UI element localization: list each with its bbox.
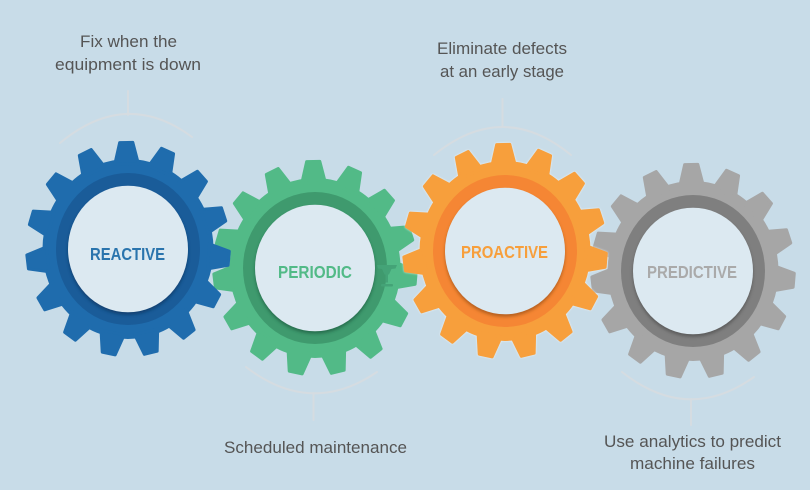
gear: periodic — [211, 160, 419, 377]
connector: periodic bracket — [246, 367, 377, 420]
caption: predictive — [604, 433, 781, 473]
icon: trophy on periodic gear — [377, 265, 397, 286]
connector: reactive bracket — [60, 91, 192, 143]
caption: predictive: machine failures — [630, 455, 755, 473]
label: reactive: REACTIVE — [90, 244, 165, 264]
caption: proactive: Eliminate defects — [437, 40, 567, 58]
caption: predictive: Use analytics to predict — [604, 433, 781, 451]
caption: reactive: equipment is down — [55, 56, 201, 74]
caption: proactive — [437, 40, 567, 81]
caption: reactive: Fix when the — [80, 33, 177, 51]
gear: reactive — [24, 141, 232, 358]
caption: proactive: at an early stage — [440, 63, 564, 81]
label: periodic: PERIODIC — [278, 262, 352, 282]
connector: predictive bracket — [622, 372, 754, 425]
gear: predictive — [589, 163, 797, 380]
caption: reactive — [55, 33, 201, 74]
caption: periodic: Scheduled maintenance — [224, 439, 407, 457]
label: proactive: PROACTIVE — [461, 242, 548, 262]
gear: proactive — [401, 143, 609, 360]
connector: proactive bracket — [434, 99, 571, 155]
label: predictive: PREDICTIVE — [647, 262, 737, 282]
